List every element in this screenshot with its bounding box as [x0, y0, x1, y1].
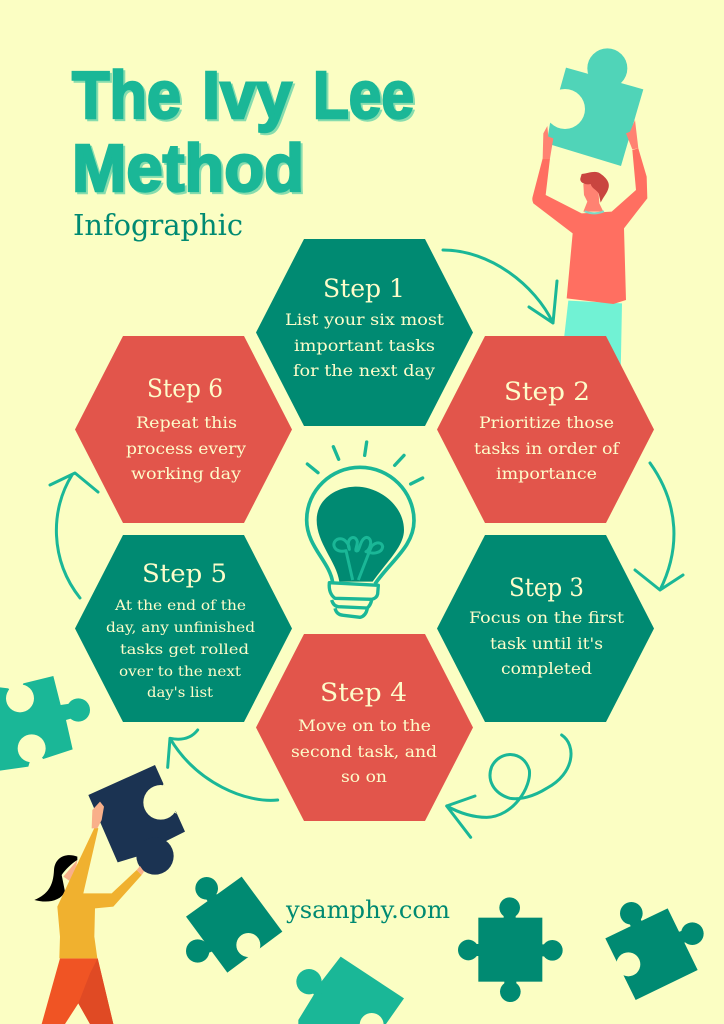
hexagon: step 6: Repeat this: [136, 413, 237, 432]
hexagon: step 1: important tasks: [294, 336, 435, 355]
man's hands: [543, 120, 638, 158]
icon: light bulb: [307, 442, 423, 617]
hexagon: step 5: [75, 535, 292, 722]
puzzle piece: centre green: [186, 877, 282, 973]
hexagon: step 1: List your six most: [285, 310, 445, 329]
arrow: step 3 to 4: [447, 735, 571, 837]
arrow: step 4 to 5: [168, 730, 278, 800]
woman's hands: [92, 802, 144, 875]
hexagon: step 1: for the next day: [293, 361, 435, 380]
hexagon: step 1: [256, 239, 473, 426]
puzzle piece: square: [458, 897, 563, 1002]
title: Lee: [315, 60, 416, 135]
hexagon: step 2: Prioritize those: [479, 413, 614, 432]
hexagon: step 2: tasks in order of: [474, 439, 620, 458]
hexagon: step 4: Move on to the: [298, 716, 431, 735]
hexagon: step 6: [75, 336, 292, 523]
man's collar: [585, 211, 604, 213]
arrow: step 2 to 3: [635, 463, 683, 590]
hexagon: step 4: so on: [341, 767, 387, 786]
puzzle piece: left teal: [0, 676, 90, 771]
woman's top: [57, 827, 142, 958]
hexagon: step 6: Step 6: [147, 374, 223, 403]
illustration: man holding puzzle piece: [532, 48, 647, 373]
arrow: step 5 to 6: [50, 473, 98, 598]
hexagon: step 2: [437, 336, 654, 523]
hexagon: step 5: tasks get rolled: [120, 642, 249, 658]
woman's trousers shade: [78, 958, 113, 1024]
man's trousers: [560, 301, 622, 373]
woman's trousers: [42, 958, 113, 1024]
hexagon: step 3: Step 3: [509, 573, 584, 602]
woman's face: [63, 860, 77, 882]
hexagon: step 5: day's list: [147, 685, 213, 701]
man's arms and torso: [532, 148, 647, 304]
puzzle piece: navy: [88, 765, 185, 875]
woman's hair: [34, 855, 77, 902]
hexagon: step 5: At the end of the: [114, 598, 246, 614]
hexagon: step 3: [437, 535, 654, 722]
illustration: woman holding puzzle piece: [0, 676, 282, 1024]
hexagon: step 5: day, any unfinished: [106, 620, 255, 636]
puzzle piece: right: [605, 902, 704, 1000]
man's neck and face: [583, 182, 603, 212]
hexagon: step 4: [256, 634, 473, 821]
title: Method: [74, 133, 306, 208]
hexagon: step 2: Step 2: [504, 377, 590, 406]
title: Method: [72, 131, 304, 206]
hexagon: step 1: Step 1: [323, 274, 405, 303]
hexagon: step 3: task until it's: [490, 634, 603, 653]
hexagon: step 2: importance: [496, 464, 597, 483]
bottom puzzle pieces: [296, 897, 704, 1024]
hexagon: step 5: Step 5: [142, 559, 227, 588]
website: ysamphy.com: [285, 896, 450, 924]
filament: [334, 537, 383, 580]
hexagon: step 3: completed: [501, 659, 592, 678]
title: The: [74, 60, 183, 135]
title: Ivy: [204, 60, 294, 135]
hexagon: step 6: working day: [131, 464, 241, 483]
puzzle piece: light teal: [296, 957, 404, 1024]
hexagon: step 3: Focus on the first: [469, 608, 625, 627]
arrow: step 1 to 2: [443, 250, 557, 323]
bulb inner fill: [317, 487, 404, 582]
title: The: [72, 58, 181, 133]
title: Lee: [313, 58, 414, 133]
man's hair: [580, 172, 609, 203]
puzzle piece held by man: [545, 48, 643, 166]
hexagon: step 6: process every: [126, 439, 246, 458]
bulb base: [329, 583, 378, 617]
hexagon: step 4: second task, and: [291, 742, 437, 761]
title: Ivy: [202, 58, 292, 133]
bulb outline: [307, 467, 414, 584]
hexagon: step 4: Step 4: [320, 678, 407, 707]
light rays: [307, 442, 423, 484]
subtitle: Infographic: [73, 208, 243, 242]
title: [72, 58, 416, 208]
hexagon: step 5: over to the next: [119, 664, 241, 680]
